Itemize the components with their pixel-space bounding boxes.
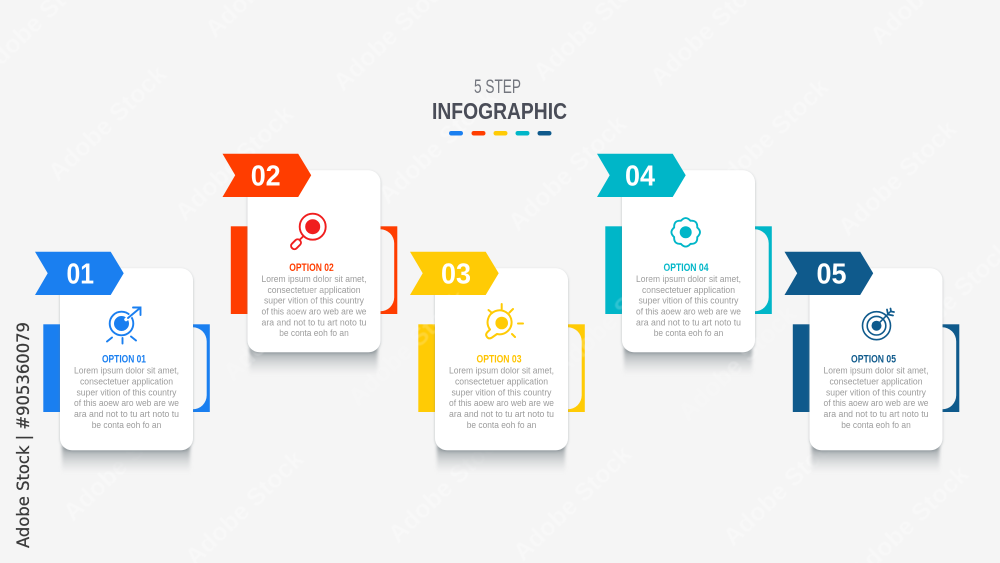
ribbon with number: 02 (251, 160, 281, 192)
icon: target with arrow (107, 308, 140, 344)
body text: ara and not to tu art noto tu (74, 409, 179, 419)
body text: of this aoew aro web are we (449, 398, 554, 408)
body text (449, 366, 554, 430)
body text: super vition of this country (264, 296, 364, 306)
card shadow (250, 348, 378, 375)
body text: Lorem ipsum dolor sit amet, (74, 366, 179, 376)
body text (262, 274, 366, 338)
body text: ara and not to tu art noto tu (449, 409, 554, 419)
body text: consectetuer application (642, 285, 735, 295)
watermark text over panels: Adobe Stock (673, 300, 802, 426)
ribbon with number (410, 252, 499, 295)
ribbon with number (35, 252, 124, 295)
ribbon with number: 03 (441, 258, 471, 290)
back bracket (605, 226, 772, 314)
watermark text over panels: Adobe Stock (218, 260, 347, 386)
body text: be conta eoh fo an (654, 328, 723, 338)
card (248, 170, 380, 352)
watermark text: Adobe Stock (170, 100, 299, 226)
body text: be conta eoh fo an (467, 420, 536, 430)
panel: option 03 (410, 252, 585, 473)
ribbon with number: 01 (67, 258, 94, 290)
body text: ara and not to tu art noto tu (824, 409, 928, 419)
stock id label: Adobe Stock | #905360079 (14, 322, 33, 548)
body text: consectetuer application (455, 377, 548, 387)
card (622, 170, 755, 352)
body text: ara and not to tu art noto tu (262, 317, 366, 327)
body text: consectetuer application (830, 377, 922, 387)
back bracket (43, 324, 210, 412)
watermark text: Adobe Stock (383, 422, 512, 548)
body text: of this aoew aro web are we (262, 307, 366, 317)
watermark text: Adobe Stock (373, 83, 502, 209)
back bracket (231, 226, 397, 314)
body text: super vition of this country (638, 296, 739, 306)
body text: Lorem ipsum dolor sit amet, (262, 274, 366, 284)
body text (74, 366, 179, 430)
heading: OPTION 02 (289, 262, 334, 274)
body text: of this aoew aro web are we (74, 398, 179, 408)
ribbon with number (222, 154, 311, 197)
watermark text: Adobe Stock (718, 425, 847, 551)
watermark text over panels: Adobe Stock (343, 285, 472, 411)
title line: 5 step: 5 STEP (474, 76, 521, 98)
title line: infographic: INFOGRAPHIC (432, 98, 567, 124)
colour dashes (449, 131, 552, 136)
body text: be conta eoh fo an (841, 420, 911, 430)
body text: super vition of this country (452, 387, 552, 397)
watermark text over panels (218, 255, 802, 426)
panel: option 04 (597, 154, 772, 375)
body text: Lorem ipsum dolor sit amet, (636, 274, 741, 284)
watermark text: Adobe Stock (508, 440, 637, 563)
body text: of this aoew aro web are we (636, 307, 741, 317)
body text: super vition of this country (76, 387, 177, 397)
watermark text: Adobe Stock (503, 110, 632, 236)
heading: OPTION 05 (851, 353, 896, 365)
body text: of this aoew aro web are we (824, 398, 928, 408)
back bracket (418, 324, 585, 412)
card shadow (624, 348, 752, 375)
ribbon with number: 05 (816, 258, 846, 290)
body text: consectetuer application (268, 285, 360, 295)
body text: Lorem ipsum dolor sit amet, (824, 366, 928, 376)
body text (636, 274, 741, 338)
panel: option 05 (784, 252, 959, 473)
heading: OPTION 04 (664, 262, 709, 274)
icon: magnifier (290, 214, 326, 250)
body text: consectetuer application (80, 377, 173, 387)
watermark text: Adobe Stock (58, 400, 187, 526)
watermark text over panels: Adobe Stock (548, 255, 677, 381)
card shadow (812, 446, 940, 473)
watermark text: Adobe Stock (43, 60, 172, 186)
body text (824, 366, 928, 430)
back bracket (793, 324, 959, 412)
body text: be conta eoh fo an (92, 420, 161, 430)
icon: bullseye with dart (862, 308, 894, 340)
panel: option 02 (222, 154, 397, 375)
ribbon with number (597, 154, 686, 197)
heading: OPTION 01 (102, 353, 146, 365)
watermark text: Adobe Stock (833, 115, 962, 241)
card (60, 268, 193, 450)
icon: gear badge (671, 218, 700, 247)
card (810, 268, 942, 450)
body text: Lorem ipsum dolor sit amet, (449, 366, 554, 376)
card shadow (62, 446, 190, 473)
card (435, 268, 568, 450)
ribbon with number: 04 (625, 160, 655, 192)
watermark text: Adobe Stock (705, 73, 834, 199)
body text: ara and not to tu art noto tu (636, 317, 741, 327)
card shadow (437, 446, 565, 473)
body text: super vition of this country (826, 387, 926, 397)
ribbon with number (784, 252, 873, 295)
panel: option 01 (35, 252, 210, 473)
body text: be conta eoh fo an (279, 328, 349, 338)
title (432, 76, 567, 136)
icon: light bulb (486, 304, 523, 338)
heading: OPTION 03 (476, 353, 522, 365)
